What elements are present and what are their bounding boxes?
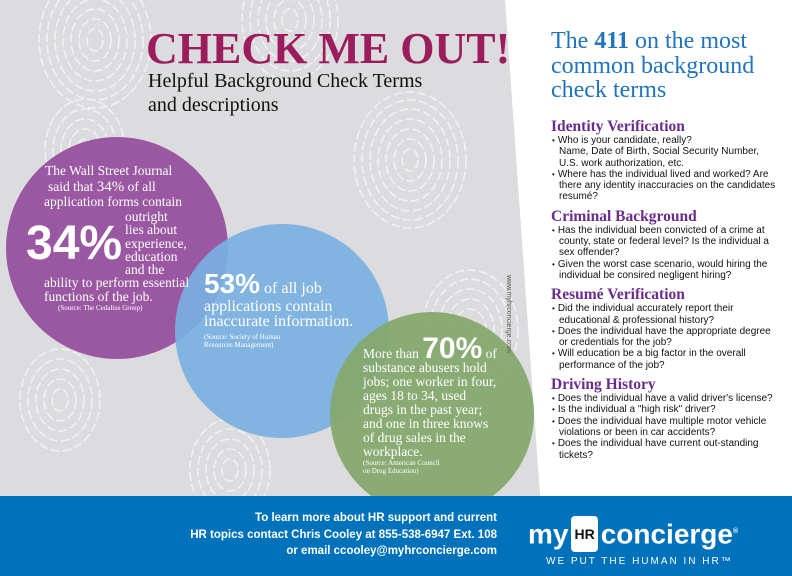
terms list	[512, 118, 775, 461]
stat: 34%: and the	[125, 262, 164, 277]
subtitle	[148, 70, 422, 116]
stat: 70%: on Drug Education)	[363, 467, 419, 475]
stat: 34%: The Wall Street Journal	[45, 163, 172, 178]
stat: 34%	[26, 163, 534, 412]
contact text	[190, 512, 497, 557]
stat: 34%: functions of the job.	[44, 289, 153, 304]
right heading: check terms	[551, 77, 666, 103]
section: identity: Name, Date of Birth, Social Security Number, U.S. work authorization, etc.	[559, 146, 759, 169]
stat: 34%: (Source: The Cedalius Group)	[58, 304, 142, 312]
section: driving: Does the individual have multiple motor vehicle violations or been in car accidents?	[558, 416, 766, 438]
stat: 70%: of drug sales in the	[363, 430, 466, 445]
stat: 34%: experience,	[125, 236, 187, 251]
vertical url: www.myhrconcierge.com	[505, 275, 512, 353]
section: criminal	[551, 208, 769, 281]
logo: my concierge®	[528, 518, 738, 549]
stat: 70%: More than 70% of	[363, 332, 497, 365]
logo	[528, 516, 738, 567]
section: resume: Will education be a big factor in the overall performance of the job?	[558, 348, 746, 371]
stat: 53%: inaccurate information.	[204, 313, 353, 330]
footer	[0, 496, 792, 576]
section: driving: Does the individual have current out-standing tickets?	[558, 438, 758, 461]
stat: 53%: applications contain	[204, 298, 332, 314]
logo: HR	[574, 526, 595, 542]
logo: WE PUT THE HUMAN IN HR™	[546, 556, 733, 567]
section: driving: Does the individual have a valid driver's license?	[558, 393, 773, 404]
stat: 70%: (Source: American Council	[363, 459, 440, 467]
stat: 70%: substance abusers hold	[363, 360, 487, 375]
stat: 70%: jobs; one worker in four,	[363, 374, 496, 389]
section: driving: Is the individual a "high risk" driver?	[558, 404, 716, 415]
section: driving	[551, 376, 773, 461]
contact text: HR topics contact Chris Cooley at 855-538-6947 Ext. 108	[190, 528, 497, 540]
contact text: or email ccooley@myhrconcierge.com	[286, 545, 497, 557]
stat: 53%	[204, 268, 534, 466]
stat: 53%: Resources Management)	[204, 340, 273, 348]
stat: 34%: outright	[125, 209, 168, 224]
section: resume: Resumé Verification	[551, 286, 685, 303]
stat: 70%	[362, 332, 497, 475]
stat: 53%: (Source: Society of Human	[204, 332, 280, 340]
section: identity: Who is your candidate, really?	[558, 135, 692, 146]
stat: 34%: lies about	[125, 222, 177, 237]
section: criminal: Has the individual been convicted of a crime at county, state or federal level? Is the individual a sex offender?	[558, 225, 769, 258]
stat: 34%: 34%	[26, 217, 122, 270]
stat: 70%: ages 18 to 34, used	[363, 388, 466, 403]
section: resume	[551, 286, 771, 371]
stat: 34%: said that 34% of all	[48, 179, 156, 195]
subtitle: Helpful Background Check Terms	[148, 70, 422, 92]
section: resume: Does the individual have the appropriate degree or credentials for the job?	[558, 326, 771, 348]
stat: 70%: drugs in the past year;	[363, 402, 482, 417]
contact text: To learn more about HR support and current	[255, 512, 497, 524]
stat: 70%: workplace.	[363, 444, 423, 459]
stat: 34%: education	[125, 249, 177, 264]
title: CHECK ME OUT!	[146, 24, 510, 73]
right heading: The 411 on the most	[551, 28, 747, 54]
stat: 34%: ability to perform essential	[44, 275, 189, 290]
section: criminal: Criminal Background	[551, 208, 697, 225]
stat: 53%: 53% of all job	[204, 268, 322, 299]
right heading	[551, 28, 754, 103]
section: identity	[551, 118, 775, 202]
section: driving: Driving History	[551, 376, 656, 393]
subtitle: and descriptions	[148, 94, 279, 116]
right heading: common background	[551, 52, 754, 78]
section: criminal: Given the worst case scenario, would hiring the individual be consired negligent hiring?	[558, 259, 767, 281]
section: identity: Identity Verification	[551, 118, 685, 135]
stat: 34%: application forms contain	[44, 194, 182, 209]
section: identity: Where has the individual lived and worked? Are there any identity inaccuracies on the candidates resumé?	[558, 169, 775, 202]
stat: 70%: and one in three knows	[363, 416, 488, 431]
section: resume: Did the individual accurately report their educational & professional history?	[558, 303, 733, 326]
